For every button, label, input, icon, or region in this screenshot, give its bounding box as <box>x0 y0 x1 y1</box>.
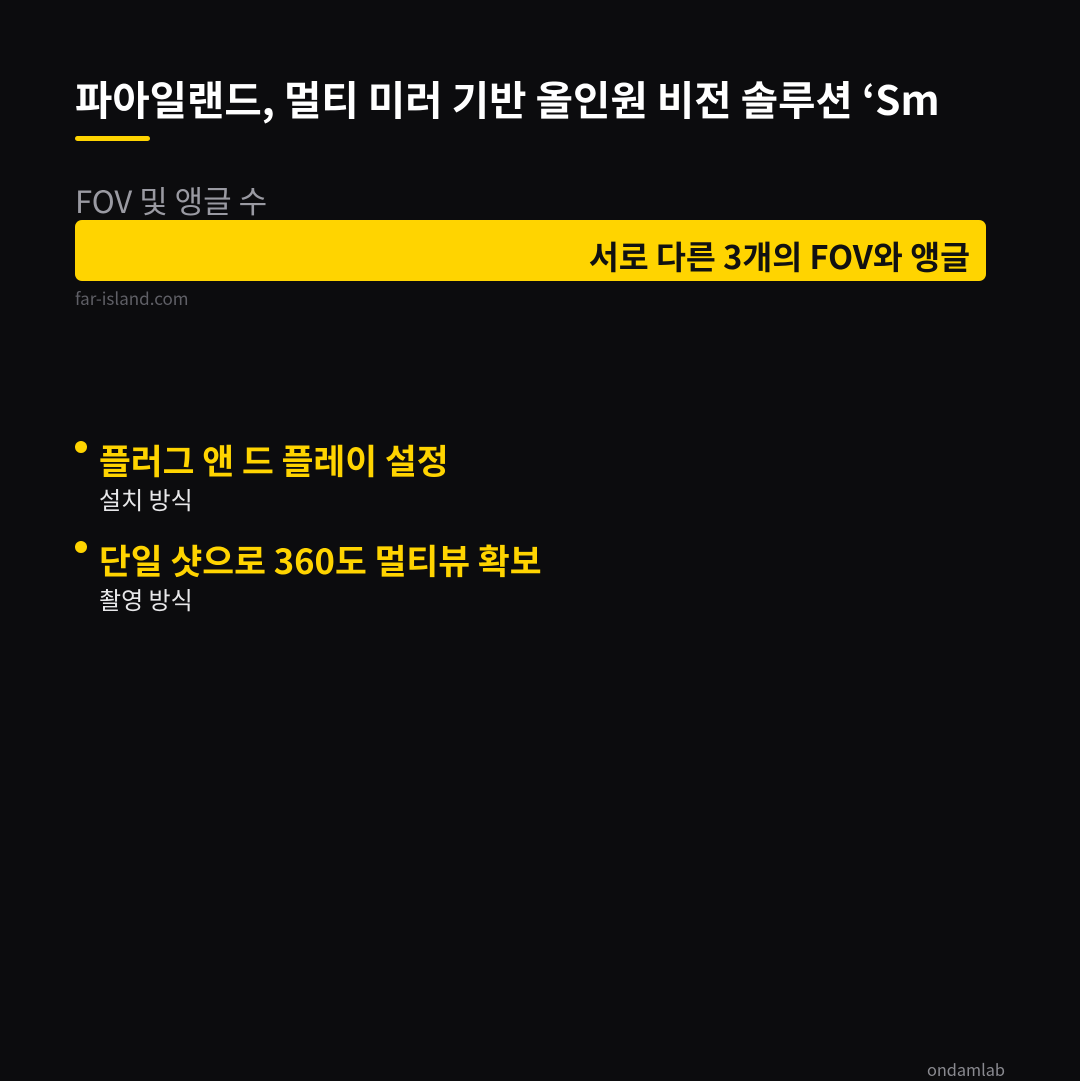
label: FOV 및 앵글 수: FOV 및 앵글 수 <box>75 177 267 222</box>
source: far-island.com <box>75 285 189 310</box>
highlight bar <box>75 220 986 281</box>
bullet sub text: 설치 방식 <box>99 481 193 516</box>
title: 파아일랜드, 멀티 미러 기반 올인원 비전 솔루션 ‘Sm <box>75 68 940 127</box>
bullet sub text: 촬영 방식 <box>99 581 193 616</box>
bullet item 2 <box>75 534 542 616</box>
bullet item 1 <box>75 434 449 516</box>
footer brand: ondamlab <box>927 1057 1005 1081</box>
bullet heading: 단일 샷으로 360도 멀티뷰 확보 <box>99 534 542 584</box>
bar value text: 서로 다른 3개의 FOV와 앵글 <box>589 232 970 279</box>
bullet dot <box>75 441 87 453</box>
bullet heading: 플러그 앤 드 플레이 설정 <box>99 434 449 484</box>
title underline accent <box>75 136 150 141</box>
bullet dot <box>75 541 87 553</box>
